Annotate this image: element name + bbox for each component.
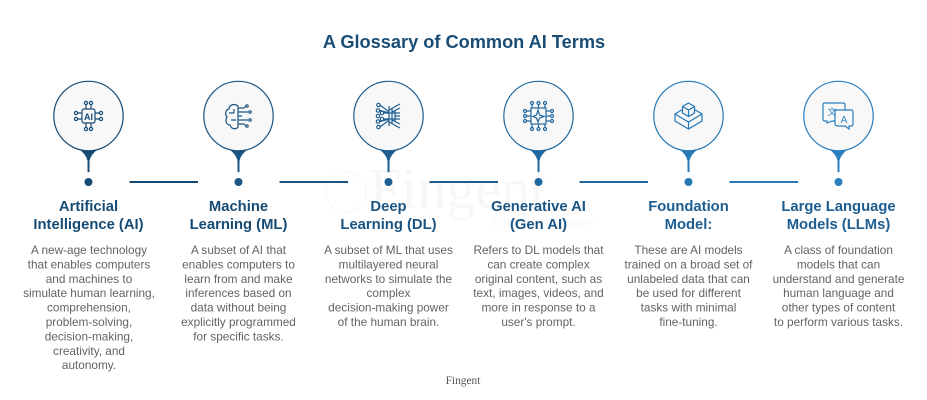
description: autonomy. bbox=[62, 358, 116, 372]
column: Generative AI bbox=[473, 81, 604, 329]
watermark: Fingent bbox=[369, 156, 546, 221]
description: original content, such as bbox=[475, 272, 602, 286]
description: complex bbox=[367, 286, 411, 300]
description: A class of foundation bbox=[784, 243, 893, 257]
description: models that can bbox=[797, 257, 880, 271]
heading: Foundation bbox=[648, 199, 729, 215]
description: creativity, and bbox=[53, 344, 125, 358]
description: A subset of ML that uses bbox=[324, 243, 453, 257]
description: inferences based on bbox=[185, 286, 292, 300]
heading: Intelligence (AI) bbox=[33, 217, 144, 233]
description: A subset of AI that bbox=[191, 243, 287, 257]
column: Foundation Model bbox=[625, 81, 753, 329]
icon: translation bubbles bbox=[823, 103, 853, 129]
description: to perform various tasks. bbox=[774, 315, 903, 329]
heading: (Gen AI) bbox=[510, 217, 567, 233]
heading: Models (LLMs) bbox=[787, 217, 890, 233]
heading: Deep bbox=[370, 199, 407, 215]
description: understand and generate bbox=[773, 272, 905, 286]
marker: pin and dot bbox=[54, 81, 123, 186]
marker: pin and dot bbox=[354, 81, 423, 186]
description: trained on a broad set of bbox=[625, 257, 753, 271]
heading: Machine bbox=[209, 199, 268, 215]
description: A new-age technology bbox=[31, 243, 147, 257]
title: A Glossary of Common AI Terms bbox=[323, 32, 605, 52]
description: more in response to a bbox=[481, 301, 596, 315]
icon: layered box bbox=[675, 103, 702, 129]
description: networks to simulate the bbox=[325, 272, 453, 286]
icon: AI chip bbox=[74, 101, 103, 131]
icon: translation bubbles: A bbox=[841, 115, 848, 126]
heading: Large Language bbox=[781, 199, 896, 215]
icon: generative chip bbox=[524, 102, 554, 130]
description: be used for different bbox=[636, 286, 742, 300]
description: data without being bbox=[191, 301, 286, 315]
description: These are AI models bbox=[634, 243, 743, 257]
description: decision-making, bbox=[45, 329, 133, 343]
description: explicitly programmed bbox=[181, 315, 296, 329]
description: can create complex bbox=[487, 257, 590, 271]
description: fine-tuning. bbox=[659, 315, 718, 329]
description: human language and bbox=[783, 286, 894, 300]
watermark: Shaping the Future bbox=[492, 215, 594, 229]
description: problem-solving, bbox=[46, 315, 132, 329]
description: Refers to DL models that bbox=[473, 243, 604, 257]
connector lines bbox=[130, 181, 798, 183]
description: multilayered neural bbox=[339, 257, 438, 271]
heading: Learning (ML) bbox=[190, 217, 287, 233]
description: enables computers to bbox=[182, 257, 295, 271]
icon: translation bubbles: 文 bbox=[827, 106, 837, 117]
description: that enables computers bbox=[28, 257, 150, 271]
marker: pin and dot bbox=[204, 81, 273, 186]
description: tasks with minimal bbox=[641, 301, 736, 315]
description: comprehension, bbox=[47, 301, 131, 315]
marker: pin and dot bbox=[654, 81, 723, 186]
description: of the human brain. bbox=[338, 315, 439, 329]
icon: brain circuit bbox=[226, 105, 251, 129]
description: text, images, videos, and bbox=[473, 286, 604, 300]
column: Machine Learning bbox=[181, 81, 296, 343]
icon: AI chip: AI bbox=[84, 112, 93, 122]
description: other types of content bbox=[782, 301, 896, 315]
column: Deep Learning bbox=[324, 81, 453, 329]
marker: pin and dot bbox=[804, 81, 873, 186]
description: unlabeled data that can bbox=[627, 272, 750, 286]
description: and machines to bbox=[46, 272, 133, 286]
description: user's prompt. bbox=[501, 315, 576, 329]
column: Large Language Models bbox=[773, 81, 905, 329]
column: Artificial Intelligence bbox=[23, 81, 155, 372]
description: decision-making power bbox=[328, 301, 449, 315]
footer credit: Fingent bbox=[446, 375, 481, 387]
heading: Generative AI bbox=[491, 199, 586, 215]
description: simulate human learning, bbox=[23, 286, 155, 300]
heading: Model: bbox=[665, 217, 712, 233]
heading: Artificial bbox=[59, 199, 118, 215]
icon: neural network bbox=[376, 103, 400, 129]
marker: pin and dot bbox=[504, 81, 573, 186]
watermark bbox=[326, 156, 594, 229]
heading: Learning (DL) bbox=[340, 217, 437, 233]
description: for specific tasks. bbox=[193, 329, 284, 343]
description: learn from and make bbox=[184, 272, 293, 286]
